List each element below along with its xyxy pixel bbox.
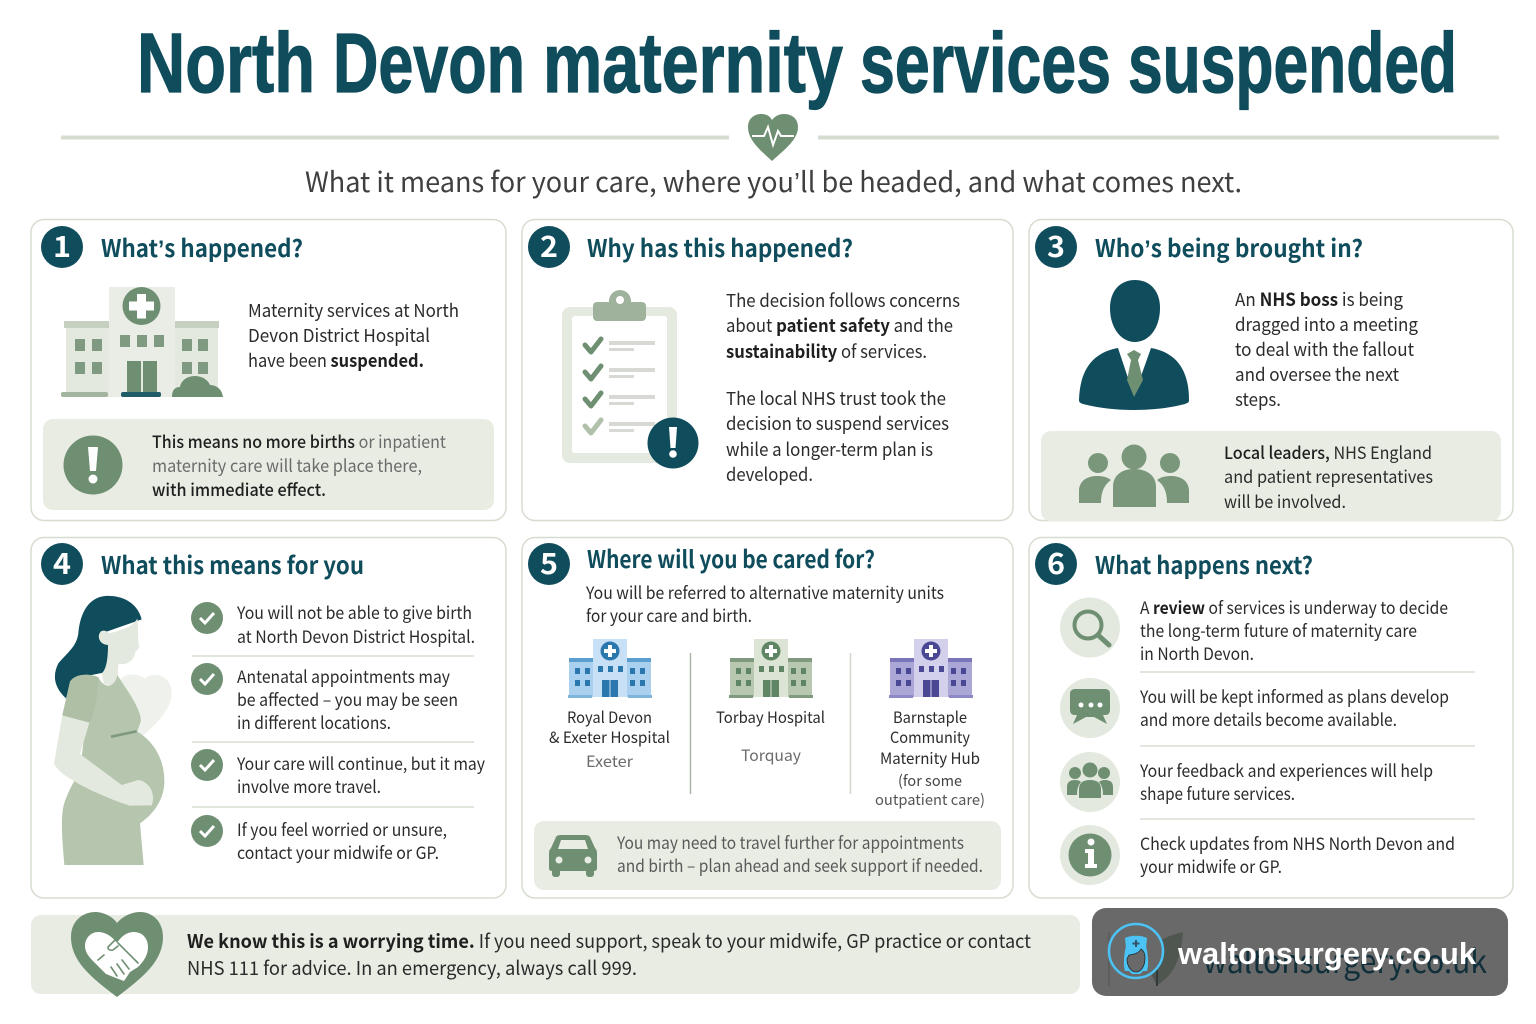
text block: have been suspended. [248,347,424,373]
illustration: pregnant woman [54,596,172,865]
watermark badge: waltonsurgery.co.uk [1177,936,1477,971]
step: check updates: your midwife or GP. [1140,853,1282,878]
callout: local leaders: will be involved. [1224,488,1346,513]
callout: travel [534,821,1001,890]
icon: nurse logo [1109,924,1163,978]
title: maternity [543,16,843,110]
check item 3: Your care will continue, but it may [236,750,485,775]
text block: The decision follows concerns [726,287,960,313]
label: Barnstaple: Community [890,726,970,748]
number badge 1: 1 [53,224,71,266]
support banner [31,912,1080,997]
panel: who's being brought in [1029,220,1513,521]
title [137,16,1457,110]
callout: local leaders: Local leaders, NHS England [1224,439,1432,464]
step: review [1060,594,1448,665]
icon: exclamation [64,436,122,494]
step: review: A review of services is underway to decide [1140,594,1448,619]
check item 4: contact your midwife or GP. [237,839,439,864]
text block: sustainability of services. [726,338,927,364]
watermark badge [1092,908,1508,996]
icon: green hospital [729,639,813,698]
number badge 4 [41,541,83,585]
title: North [137,16,315,110]
label: Royal Devon: & Exeter Hospital [549,726,670,748]
icon: heart with pulse [748,114,798,161]
panel: where will you be cared for [522,538,1013,898]
step: review: the long-term future of maternity care [1140,617,1417,642]
label: Barnstaple: Maternity Hub [880,747,980,769]
number badge 5: 5 [540,541,558,583]
label: Royal Devon [549,706,670,772]
number badge 2: 2 [540,224,558,266]
text block: about patient safety and the [726,312,953,338]
heading: Why has this happened? [587,229,853,264]
text block: The local NHS trust took the [726,385,946,411]
panel: what this means for you [31,538,506,898]
icon: person in suit [1079,280,1189,410]
check item 1: You will not be able to give birth [236,599,472,624]
icon: heart with handshake [71,912,163,997]
callout: local leaders: and patient representatives [1224,463,1433,488]
step: kept informed: and more details become available. [1140,706,1397,731]
heading: Who’s being brought in? [1095,229,1363,264]
label: Royal Devon: Exeter [586,750,634,772]
label: Royal Devon: Royal Devon [567,706,652,728]
step: feedback [1060,752,1433,812]
panel: why has this happened [522,220,1013,520]
text block: developed. [726,461,813,487]
text block: to deal with the fallout [1235,336,1414,362]
label: Barnstaple: Barnstaple [893,706,967,728]
label: Barnstaple [875,706,985,810]
callout: no more births: maternity care will take place there, [152,452,422,477]
text block [248,297,459,373]
label: Barnstaple: (for some [898,770,962,791]
callout: no more births: with immediate effect. [152,476,326,501]
intro text: for your care and birth. [586,602,752,627]
icon: purple hospital [889,639,973,698]
icon: blue hospital [568,639,652,698]
watermark badge: waltonsurgery.co.uk [1203,937,1487,983]
label: Torbay: Torquay [741,744,801,766]
callout: local leaders [1041,431,1501,521]
step: kept informed: You will be kept informed as plans develop [1139,683,1449,708]
step: check updates: Check updates from NHS North Devon and [1140,830,1455,855]
callout: travel: You may need to travel further for appointments [616,829,964,854]
intro text: You will be referred to alternative maternity units [585,579,944,604]
callout: no more births: This means no more births or inpatient [152,428,447,453]
number badge 6: 6 [1047,541,1065,583]
number badge 4: 4 [53,541,71,583]
label: Torbay [716,706,825,766]
text block: decision to suspend services [726,410,949,436]
step: feedback: Your feedback and experiences will help [1139,757,1433,782]
number badge 2 [528,224,570,268]
label: Barnstaple: outpatient care) [875,789,985,810]
check item 4: If you feel worried or unsure, [237,816,447,841]
icon: clipboard [562,290,698,468]
text block [726,287,960,487]
text block: dragged into a meeting [1235,311,1418,337]
step: review: in North Devon. [1140,640,1254,665]
subtitle: What it means for your care, where you’ll be headed, and what comes next. [305,161,1242,201]
title: services [860,16,1111,110]
support banner: We know this is a worrying time. If you need support, speak to your midwife, GP practice or contact [187,927,1031,954]
heading: Where will you be cared for? [587,540,875,575]
icon: group of people [1079,444,1189,507]
check item 1 [191,599,475,648]
step: kept informed [1060,678,1449,738]
text block [1235,286,1418,412]
check item 4 [191,815,447,864]
check item 2: be affected – you may be seen [237,686,458,711]
icon: hospital [61,287,223,397]
support banner: NHS 111 for advice. In an emergency, always call 999. [187,954,637,981]
text block: Devon District Hospital [248,322,430,348]
number badge 5 [528,541,570,585]
text block: while a longer-term plan is [726,436,933,462]
label: Torbay: Torbay Hospital [716,706,825,728]
step: feedback: shape future services. [1140,780,1295,805]
heading: What this means for you [101,546,364,581]
text block: An NHS boss is being [1235,286,1403,312]
title: Devon [333,16,525,110]
icon: car [549,835,597,877]
heading: What’s happened? [101,229,303,264]
heading: What happens next? [1095,546,1313,581]
check item 3: involve more travel. [237,773,381,798]
intro text [585,579,944,627]
step: check updates [1060,825,1455,885]
checklist [191,599,485,864]
number badge 3: 3 [1047,224,1065,266]
check item 1: at North Devon District Hospital. [237,623,475,648]
panel: what's happened [31,220,506,520]
number badge 3 [1035,224,1077,268]
text block: steps. [1235,386,1281,412]
number badge 1 [41,224,83,268]
callout: no more births [43,419,494,510]
panel: what happens next [1029,538,1513,898]
check item 2 [191,663,458,734]
check item 3 [191,749,485,798]
number badge 6 [1035,541,1077,585]
check item 2: Antenatal appointments may [237,663,450,688]
text block: and oversee the next [1235,361,1399,387]
check item 2: in different locations. [237,709,391,734]
callout: travel: and birth – plan ahead and seek support if needed. [617,852,983,877]
text block: Maternity services at North [248,297,459,323]
